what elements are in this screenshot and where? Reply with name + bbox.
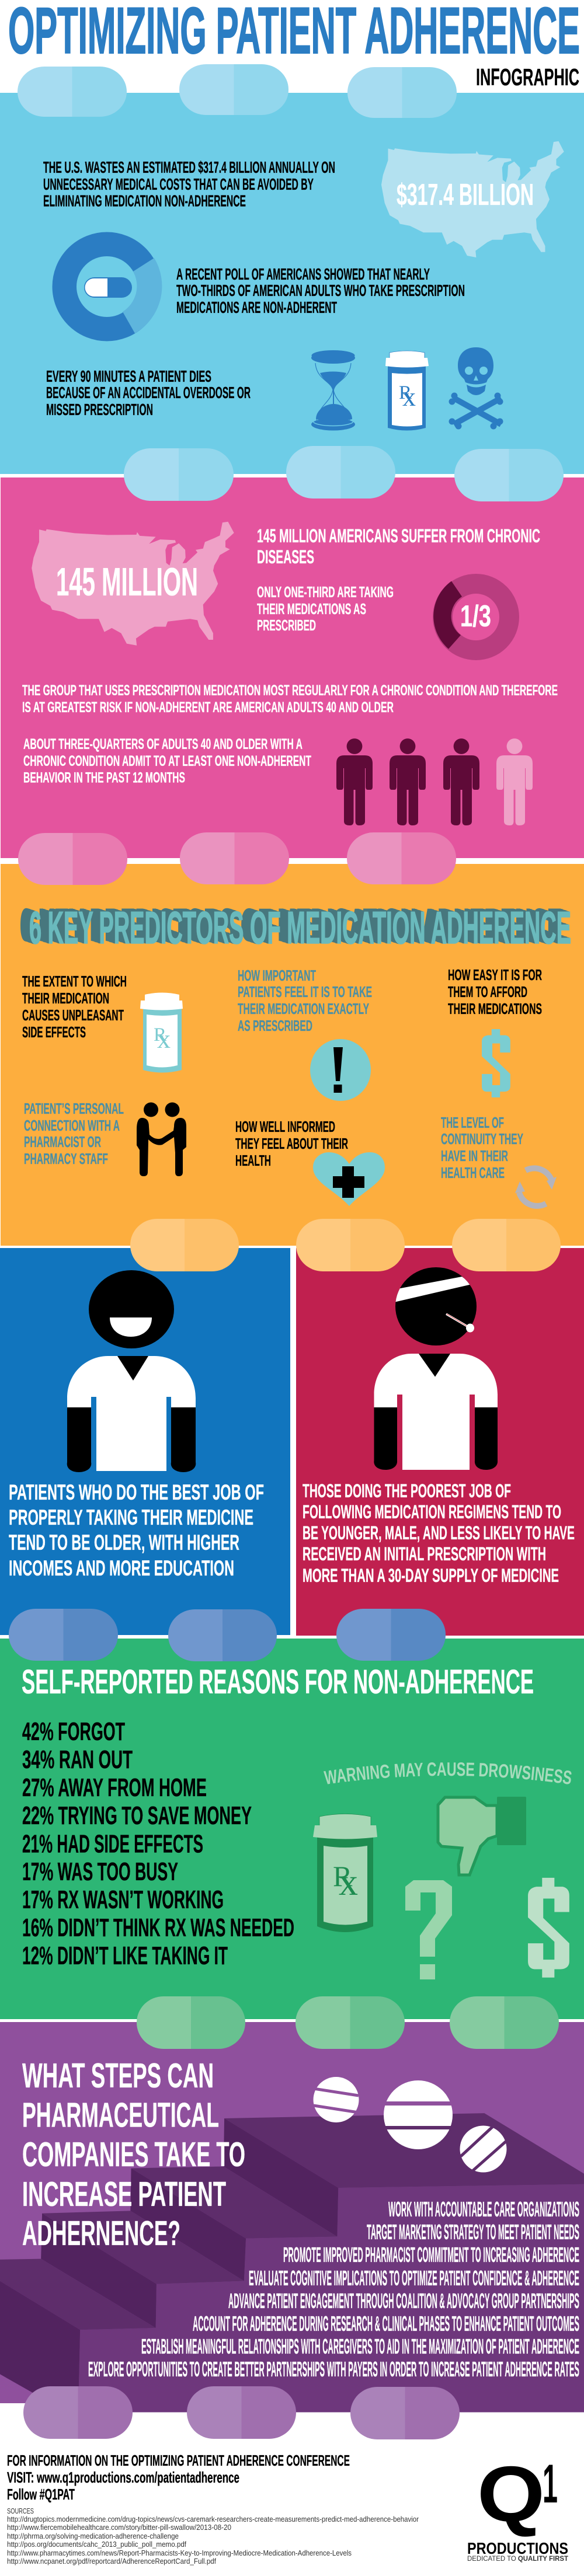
text: side effects bbox=[22, 972, 127, 1041]
text: 145 million americans: DISEASES bbox=[257, 546, 314, 567]
icon: rx bottle bbox=[385, 351, 429, 431]
text: continuity: HAVE IN THEIR bbox=[441, 1147, 508, 1165]
text: group at greatest risk bbox=[22, 682, 558, 716]
arc text: warning label bbox=[324, 1762, 572, 1784]
text: importance: HOW IMPORTANT bbox=[238, 967, 316, 984]
text: side effects: THEIR MEDICATION bbox=[22, 989, 109, 1007]
logo: Q1 productions: Q bbox=[477, 2450, 545, 2538]
pill row: green bbox=[137, 1996, 559, 2049]
text: three-quarters of adults: ABOUT THREE-QUARTERS OF ADULTS 40 AND OLDER WITH A bbox=[23, 736, 303, 752]
text: annual waste: THE U.S. WASTES AN ESTIMATED $317.4 BILLION ANNUALLY ON bbox=[43, 158, 335, 176]
text: annual waste: ELIMINATING MEDICATION NON-ADHERENCE bbox=[43, 191, 246, 210]
text: every 90 minutes bbox=[46, 367, 251, 419]
text: poll result: MEDICATIONS ARE NON-ADHERENT bbox=[176, 298, 337, 316]
icon: rx bottle: R bbox=[154, 1024, 166, 1045]
text: well informed: THEY FEEL ABOUT THEIR bbox=[235, 1135, 348, 1152]
icon: rx bottle: x bbox=[339, 1861, 358, 1904]
icon: question mark bbox=[405, 1880, 452, 1979]
text: affordability bbox=[448, 966, 542, 1017]
text: best adherers: PATIENTS WHO DO THE BEST JOB OF bbox=[9, 1480, 264, 1504]
text: continuity: HEALTH CARE bbox=[441, 1164, 505, 1181]
text: three-quarters of adults: CHRONIC CONDITION ADMIT TO AT LEAST ONE NON-ADHERENT bbox=[23, 753, 311, 769]
icon: thumbs down bbox=[438, 1797, 526, 1875]
text: side effects: SIDE EFFECTS bbox=[22, 1023, 86, 1041]
text: three-quarters of adults bbox=[23, 736, 311, 786]
icon: sick patient bbox=[374, 1267, 498, 1470]
footer: sources bbox=[7, 2507, 419, 2565]
footer: sources: http://pos.org/documents/cahc_2013_public_poll_memo.pdf bbox=[7, 2540, 186, 2549]
list: reasons with percentages: 21% HAD SIDE EFFECTS bbox=[22, 1829, 203, 1859]
text: personal connection: PHARMACIST OR bbox=[24, 1133, 101, 1151]
text: every 90 minutes: EVERY 90 MINUTES A PATIENT DIES bbox=[46, 367, 211, 385]
list: reasons with percentages: 17% WAS TOO BUSY bbox=[22, 1857, 178, 1886]
logo: Q1 productions: 1 bbox=[543, 2453, 558, 2514]
text: best adherers: INCOMES AND MORE EDUCATION bbox=[9, 1556, 234, 1580]
panel: six key predictors bbox=[1, 864, 584, 1246]
icon: exclamation mark bbox=[310, 1039, 371, 1101]
text: continuity: CONTINUITY THEY bbox=[441, 1130, 523, 1148]
text: personal connection: PATIENT’S PERSONAL bbox=[24, 1100, 124, 1117]
text: continuity: THE LEVEL OF bbox=[441, 1114, 504, 1131]
footer: sources: http://phrma.org/solving-medication-adherence-challenge bbox=[7, 2532, 179, 2540]
text: continuity bbox=[441, 1114, 523, 1181]
text: every 90 minutes: BECAUSE OF AN ACCIDENTAL OVERDOSE OR bbox=[46, 384, 251, 402]
icon: dollar sign bbox=[528, 1878, 569, 1978]
arc text: warning label: WARNING MAY CAUSE DROWSINESS bbox=[324, 1762, 572, 1784]
list: reasons with percentages bbox=[22, 1717, 294, 1970]
text: personal connection: PHARMACY STAFF bbox=[24, 1150, 108, 1167]
list: reasons with percentages: 12% DIDN’T LIKE TAKING IT bbox=[22, 1941, 228, 1970]
text: importance: THEIR MEDICATION EXACTLY bbox=[238, 1000, 369, 1017]
pill row: purple bbox=[23, 2386, 460, 2439]
footer: conference information: FOR INFORMATION ON THE OPTIMIZING PATIENT ADHERENCE CONFERENCE bbox=[7, 2452, 350, 2469]
pictogram: three of four people bbox=[336, 738, 533, 825]
list: reasons with percentages: 17% RX WASN’T WORKING bbox=[22, 1885, 224, 1914]
text: side effects: CAUSES UNPLEASANT bbox=[22, 1006, 124, 1024]
text: poll result bbox=[176, 265, 465, 316]
footer: conference information: Follow #Q1PAT bbox=[7, 2486, 75, 2503]
icon: handshake bbox=[137, 1102, 186, 1176]
text: best adherers: PROPERLY TAKING THEIR MEDICINE bbox=[9, 1505, 253, 1529]
heading: what steps can companies take: WHAT STEPS CAN bbox=[22, 2056, 214, 2095]
map: united states with 145 million bbox=[32, 522, 234, 646]
icon: rx bottle: R bbox=[333, 1860, 353, 1892]
text: every 90 minutes: MISSED PRESCRIPTION bbox=[46, 400, 153, 419]
donut chart with pill: two-thirds non-adherent bbox=[64, 244, 162, 333]
panel: poorest adherers bbox=[296, 1248, 584, 1636]
illustration: staircase bbox=[0, 2113, 584, 2412]
heading: what steps can companies take: ADHERNENCE? bbox=[22, 2214, 180, 2253]
icon: striped tablet diagonal bbox=[460, 2126, 507, 2173]
text: personal connection bbox=[24, 1100, 124, 1167]
logo: Q1 productions bbox=[467, 2450, 568, 2563]
icon: heart with cross bbox=[313, 1152, 385, 1206]
footer: conference information bbox=[7, 2452, 350, 2503]
text: only one-third: ONLY ONE-THIRD ARE TAKING bbox=[257, 583, 394, 601]
list: reasons with percentages: 34% RAN OUT bbox=[22, 1745, 133, 1774]
heading: what steps can companies take: COMPANIES TAKE TO bbox=[22, 2135, 245, 2174]
text: importance bbox=[238, 967, 372, 1034]
icon: striped tablet large bbox=[383, 2080, 454, 2149]
footer: sources: SOURCES bbox=[7, 2507, 34, 2515]
footer: conference information: VISIT: www.q1productions.com/patientadherence bbox=[7, 2469, 239, 2486]
text: annual waste: UNNECESSARY MEDICAL COSTS THAT CAN BE AVOIDED BY bbox=[43, 175, 314, 193]
icon: rx bottle bbox=[140, 992, 183, 1073]
donut chart: one third: 1/3 bbox=[460, 599, 491, 633]
pill row: dark blue bbox=[9, 1609, 446, 1661]
text: three-quarters of adults: BEHAVIOR IN THE PAST 12 MONTHS bbox=[23, 769, 185, 786]
icon: rx bottle: x bbox=[157, 1024, 171, 1054]
logo: Q1 productions: DEDICATED TO QUALITY FIRST bbox=[467, 2556, 568, 2563]
text: best adherers: TEND TO BE OLDER, WITH HIGHER bbox=[9, 1531, 239, 1554]
text: best adherers bbox=[9, 1480, 264, 1580]
pill row: blue top bbox=[18, 64, 457, 118]
text: well informed: HEALTH bbox=[235, 1152, 271, 1169]
footer: sources: http://www.ncpanet.org/pdf/reportcard/AdherenceReportCard_Full.pdf bbox=[7, 2557, 216, 2565]
footer: sources: http://www.pharmacytimes.com/news/Report-Pharmacists-Key-to-Improving-Mediocre-Medication-Adherence-Levels bbox=[7, 2549, 352, 2557]
pill row: blue bottom bbox=[124, 446, 564, 501]
icon: skull and crossbones bbox=[449, 347, 503, 430]
heading: what steps can companies take bbox=[22, 2056, 245, 2253]
text: only one-third: THEIR MEDICATIONS AS bbox=[257, 600, 366, 618]
panel: chronic disease bbox=[1, 477, 584, 858]
text: annual waste bbox=[43, 158, 335, 210]
icon: refresh arrows bbox=[515, 1168, 557, 1206]
panel: self-reported reasons bbox=[0, 1639, 584, 2019]
icon: rx bottle bbox=[313, 1814, 377, 1932]
icon: dollar sign bbox=[482, 1029, 510, 1097]
icon: hourglass bbox=[311, 350, 355, 431]
icon: rx bottle: R bbox=[399, 382, 412, 403]
text: poorest adherers bbox=[303, 1480, 575, 1586]
donut chart: one third bbox=[433, 581, 509, 650]
text: only one-third bbox=[257, 583, 394, 634]
pill row: orange bbox=[130, 1219, 561, 1271]
icon: striped tablet small bbox=[313, 2077, 359, 2122]
panel: best adherers bbox=[0, 1248, 290, 1635]
text: affordability: THEM TO AFFORD bbox=[448, 983, 527, 1001]
footer: sources: http://drugtopics.modernmedicine.com/drug-topics/news/cvs-caremark-researchers-create-measurements-predict-med-adherence-behavior bbox=[7, 2515, 419, 2523]
list: reasons with percentages: 16% DIDN’T THINK RX WAS NEEDED bbox=[22, 1913, 294, 1942]
heading: what steps can companies take: PHARMACEUTICAL bbox=[22, 2096, 219, 2134]
map: united states with $317.4 billion bbox=[381, 141, 564, 257]
list: reasons with percentages: 22% TRYING TO SAVE MONEY bbox=[22, 1801, 252, 1830]
list: reasons with percentages: 42% FORGOT bbox=[22, 1717, 125, 1746]
text: well informed bbox=[235, 1118, 348, 1169]
pill row: pink bbox=[18, 832, 456, 885]
icon: smiling patient bbox=[67, 1270, 196, 1472]
text: only one-third: PRESCRIBED bbox=[257, 616, 316, 634]
text: well informed: HOW WELL INFORMED bbox=[235, 1118, 335, 1135]
list: reasons with percentages: 27% AWAY FROM HOME bbox=[22, 1773, 207, 1802]
text: importance: AS PRESCRIBED bbox=[238, 1017, 312, 1034]
text: side effects: THE EXTENT TO WHICH bbox=[22, 972, 127, 990]
text: importance: PATIENTS FEEL IT IS TO TAKE bbox=[238, 983, 372, 1001]
footer: sources: http://www.fiercemobilehealthcare.com/story/bitter-pill-swallow/2013-08-20 bbox=[7, 2523, 231, 2532]
text: personal connection: CONNECTION WITH A bbox=[24, 1117, 120, 1134]
list: recommended steps bbox=[88, 2197, 579, 2381]
heading: what steps can companies take: INCREASE PATIENT bbox=[22, 2175, 226, 2214]
panel: what steps can pharmaceutical companies take bbox=[0, 2022, 584, 2412]
icon: rx bottle: x bbox=[402, 382, 416, 412]
text: 145 million americans bbox=[257, 525, 540, 567]
panel: cost of non-adherence bbox=[0, 93, 584, 474]
map: united states with 145 million: 145 MILLION bbox=[56, 560, 198, 604]
